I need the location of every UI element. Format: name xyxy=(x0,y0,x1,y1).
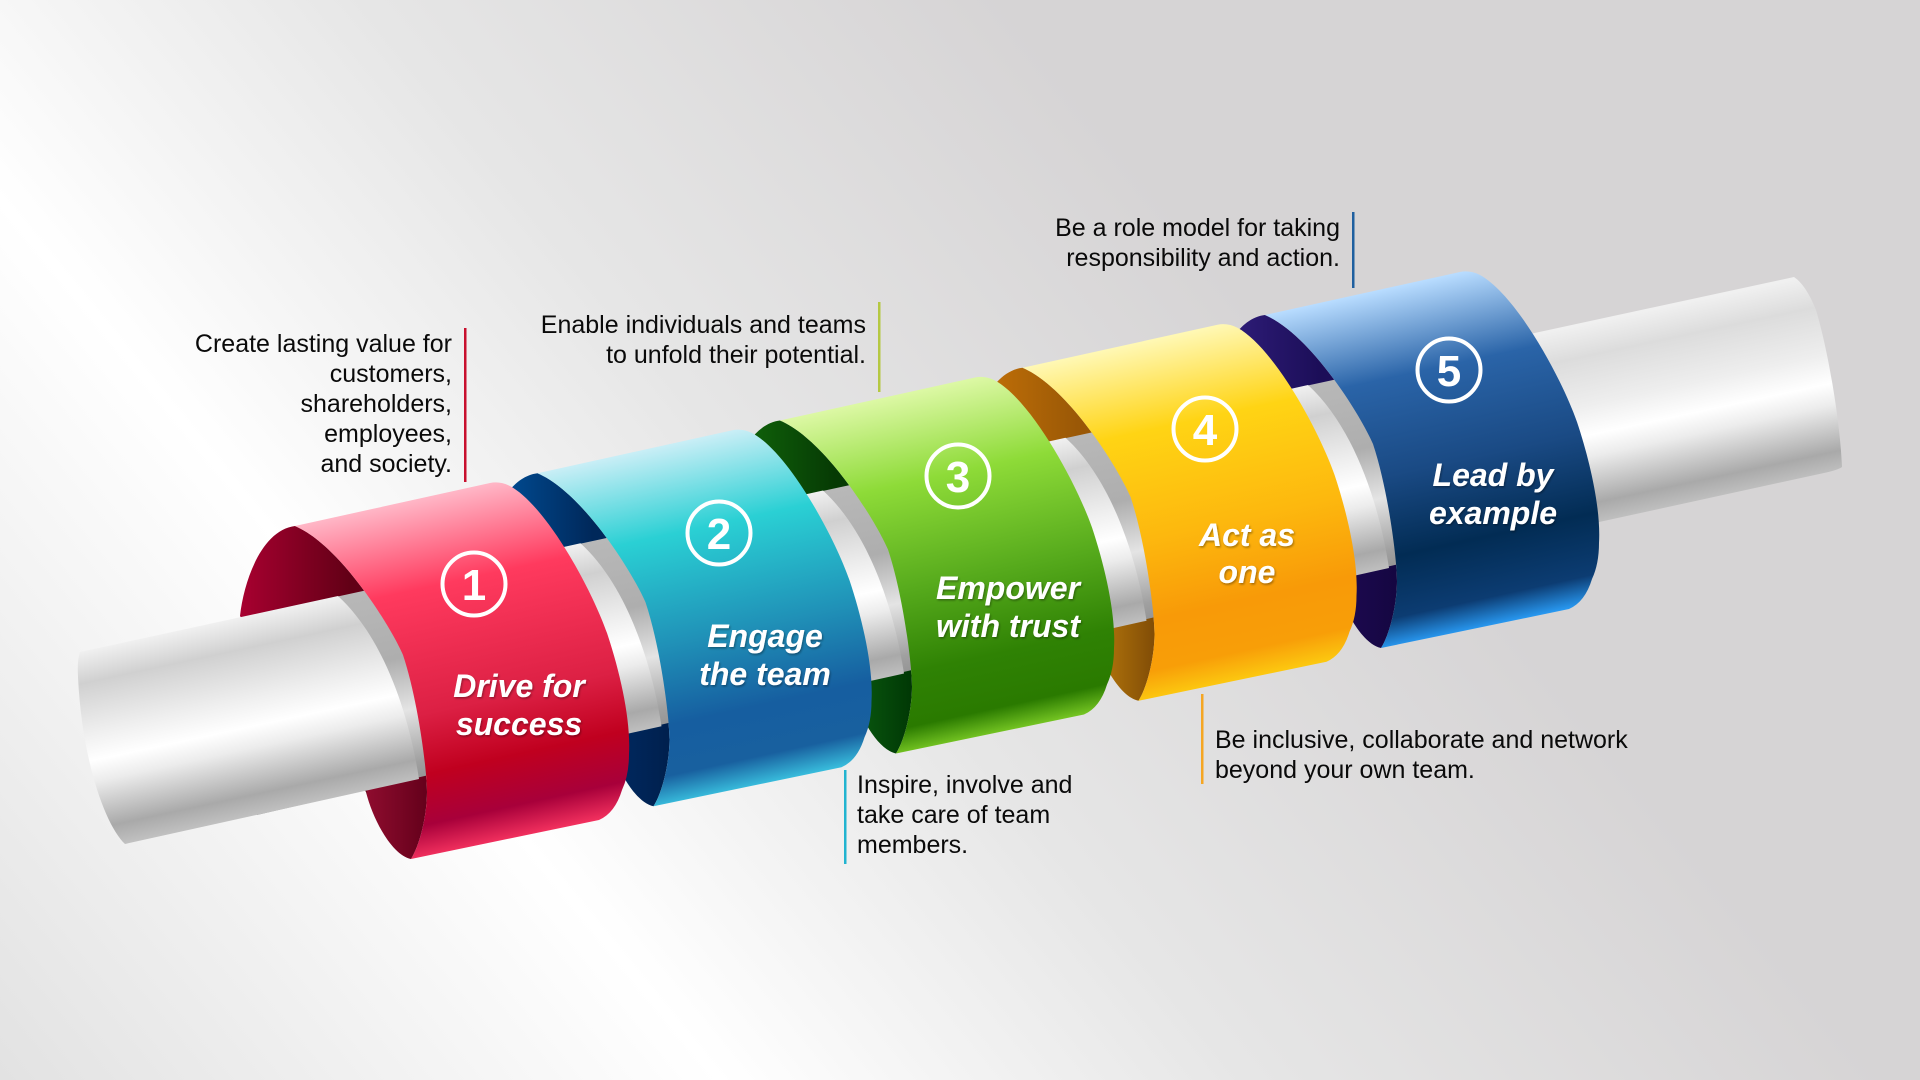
band 2: engage the team xyxy=(482,430,872,806)
callout 4: beyond your own team. xyxy=(1215,756,1475,784)
callout 5: responsibility and action. xyxy=(1066,244,1340,272)
callout 4: Be inclusive, collaborate and network xyxy=(1215,726,1628,754)
band 4: act as one xyxy=(968,324,1357,701)
band 1: drive for success, with left pipe end: 1 xyxy=(462,561,486,610)
callout 5 xyxy=(1055,212,1354,288)
callout 3: take care of team xyxy=(857,801,1050,829)
callout 2: to unfold their potential. xyxy=(606,341,866,369)
band 4: act as one: one xyxy=(1219,554,1275,590)
band 3: empower with trust: with trust xyxy=(936,608,1081,644)
band 1: drive for success, with left pipe end: success xyxy=(456,706,582,742)
callout 2: Enable individuals and teams xyxy=(541,311,866,339)
callout 2 xyxy=(541,302,880,392)
callout 3: members. xyxy=(857,831,968,859)
callout 1: Create lasting value for xyxy=(195,330,452,358)
band 4: act as one: 4 xyxy=(1193,406,1218,455)
band 4: act as one: Act as xyxy=(1198,517,1295,553)
band 1: drive for success, with left pipe end: Drive for xyxy=(453,668,586,704)
band 5: lead by example: Lead by xyxy=(1433,457,1556,493)
band 3: empower with trust xyxy=(725,377,1114,754)
band 2: engage the team: 2 xyxy=(707,510,731,559)
callout 4 xyxy=(1201,694,1628,784)
band 3: empower with trust: Empower xyxy=(936,570,1082,606)
callout 1: shareholders, xyxy=(301,390,452,418)
band 3: empower with trust: 3 xyxy=(946,453,970,502)
band 5: lead by example: example xyxy=(1429,495,1557,531)
callout 1: employees, xyxy=(324,420,452,448)
band 5: lead by example xyxy=(1210,271,1599,648)
callout 1: customers, xyxy=(330,360,452,388)
callout 3 xyxy=(844,770,1072,864)
callout 5: Be a role model for taking xyxy=(1055,214,1340,242)
callout 3: Inspire, involve and xyxy=(857,771,1072,799)
pipe: right end xyxy=(1530,277,1842,524)
callout 1 xyxy=(195,328,466,482)
band 1: drive for success, with left pipe end xyxy=(78,482,629,859)
band 2: engage the team: Engage xyxy=(707,618,823,654)
band 2: engage the team: the team xyxy=(699,656,831,692)
callout 1: and society. xyxy=(320,450,452,478)
band 5: lead by example: 5 xyxy=(1437,347,1461,396)
